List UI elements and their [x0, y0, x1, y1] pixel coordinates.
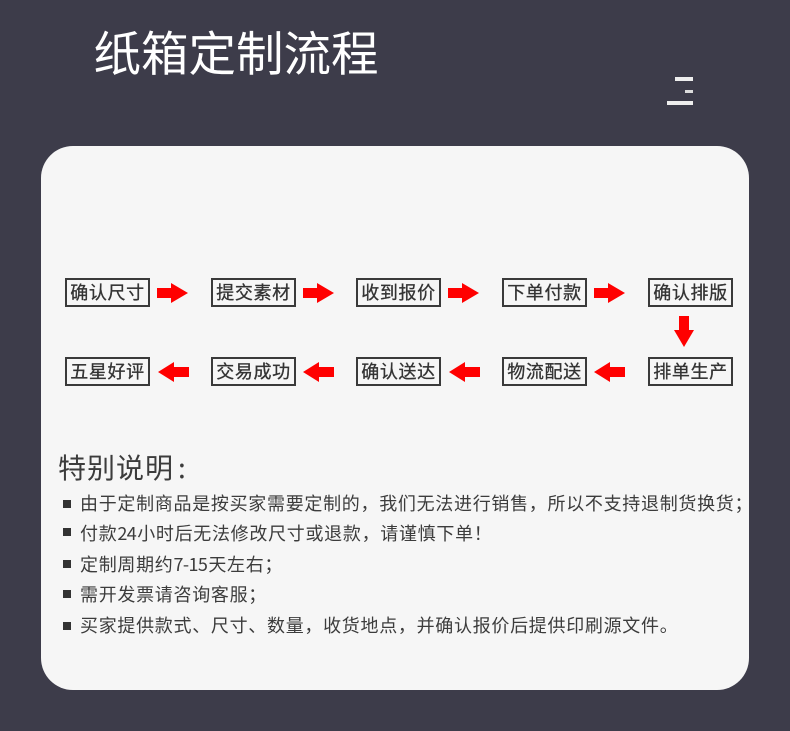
- arrow: right 2: [303, 283, 334, 303]
- bullet 2: [63, 528, 71, 536]
- note 4: 需开发票请咨询客服；: [80, 581, 267, 607]
- note 1: 由于定制商品是按买家需要定制的，我们无法进行销售，所以不支持退制货换货；: [80, 490, 753, 516]
- arrow: left 4: [158, 362, 189, 382]
- flow step: 排单生产: 排单生产: [653, 358, 728, 384]
- bullet 1: [63, 500, 71, 508]
- bullet 4: [63, 590, 71, 598]
- flow step: 收到报价: 收到报价: [361, 279, 436, 305]
- flow step: 五星好评: 五星好评: [70, 358, 145, 384]
- title: 纸箱定制流程: [94, 16, 378, 85]
- arrow: right 3: [448, 283, 479, 303]
- arrow: right 1: [157, 283, 188, 303]
- flow step: 确认尺寸: 确认尺寸: [70, 279, 145, 305]
- flow step: 确认排版: 确认排版: [653, 279, 728, 305]
- bullet 3: [63, 560, 71, 568]
- note 2: 付款24小时后无法修改尺寸或退款，请谨慎下单！: [80, 520, 492, 546]
- arrow: down: [674, 316, 694, 347]
- arrow: left 1: [594, 362, 625, 382]
- arrow: right 4: [594, 283, 625, 303]
- icon: stepped white bars: [667, 77, 693, 105]
- flow step: 确认送达: 确认送达: [361, 358, 436, 384]
- bullet 5: [63, 622, 71, 630]
- flow step: 下单付款: 下单付款: [507, 279, 582, 305]
- flow step: 物流配送: 物流配送: [507, 358, 582, 384]
- flow step: 交易成功: 交易成功: [216, 358, 291, 384]
- notes heading: 特别说明:: [58, 447, 187, 487]
- note 3: 定制周期约7-15天左右；: [80, 551, 283, 577]
- panel: process and notes: [41, 146, 749, 690]
- flow step: 提交素材: 提交素材: [216, 279, 291, 305]
- arrow: left 2: [449, 362, 480, 382]
- arrow: left 3: [303, 362, 334, 382]
- note 5: 买家提供款式、尺寸、数量，收货地点，并确认报价后提供印刷源文件。: [80, 612, 678, 638]
